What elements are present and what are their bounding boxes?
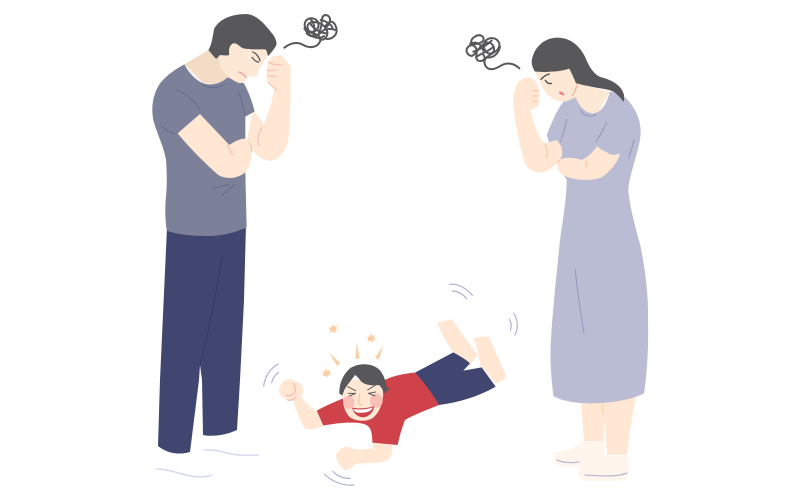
child upper arm and fist	[279, 379, 323, 429]
mother face	[535, 68, 577, 102]
father neck	[184, 50, 237, 84]
father hair	[208, 14, 277, 59]
child eyes and brows	[348, 385, 376, 396]
figure: mother	[467, 35, 648, 481]
father front arm	[178, 114, 252, 178]
child shorts	[415, 352, 496, 405]
mother front arm	[557, 146, 620, 180]
father eye and brow	[252, 52, 260, 62]
child face	[343, 380, 383, 421]
mother front shoe	[578, 456, 629, 481]
child nose	[359, 394, 362, 405]
father rear arm	[247, 55, 291, 161]
mother neck	[571, 83, 610, 115]
child red t-shirt	[317, 373, 439, 445]
mother rear shoe	[554, 441, 605, 467]
mother upper body and dress	[467, 35, 648, 403]
figure: father	[152, 14, 337, 477]
father figure upper body	[152, 14, 337, 236]
ground line left	[157, 469, 212, 477]
father trouser crease	[200, 255, 222, 365]
child fist lines	[286, 383, 296, 400]
father mouth	[239, 72, 246, 77]
mother dress	[547, 92, 648, 403]
mother shoe soles	[557, 460, 627, 476]
surprise spikes and stars	[322, 324, 383, 378]
child cheeks	[343, 394, 383, 409]
child motion lines	[264, 284, 517, 485]
mother scribble thought	[467, 35, 519, 69]
child lower arm and fist	[336, 443, 393, 470]
child hair	[339, 364, 390, 396]
father t-shirt	[152, 64, 255, 236]
mother dress creases	[561, 110, 634, 333]
child open mouth	[352, 406, 374, 417]
mother leg crease	[602, 404, 603, 414]
mother sleeve hem	[597, 137, 620, 155]
father fist lines	[227, 62, 281, 155]
mother eye and brow	[541, 74, 551, 84]
mother skin lines	[533, 85, 587, 167]
mother arm raised	[513, 78, 562, 172]
figure: child having a tantrum	[264, 284, 517, 485]
child teeth	[353, 407, 373, 413]
father scribble thought	[284, 15, 337, 48]
father shirt creases	[161, 84, 245, 196]
father trousers	[158, 224, 246, 454]
mother mouth	[559, 91, 565, 95]
child legs	[437, 319, 506, 383]
father face	[219, 42, 268, 83]
mother hair	[532, 38, 624, 102]
ground line right	[204, 450, 258, 455]
mother legs	[581, 396, 636, 455]
